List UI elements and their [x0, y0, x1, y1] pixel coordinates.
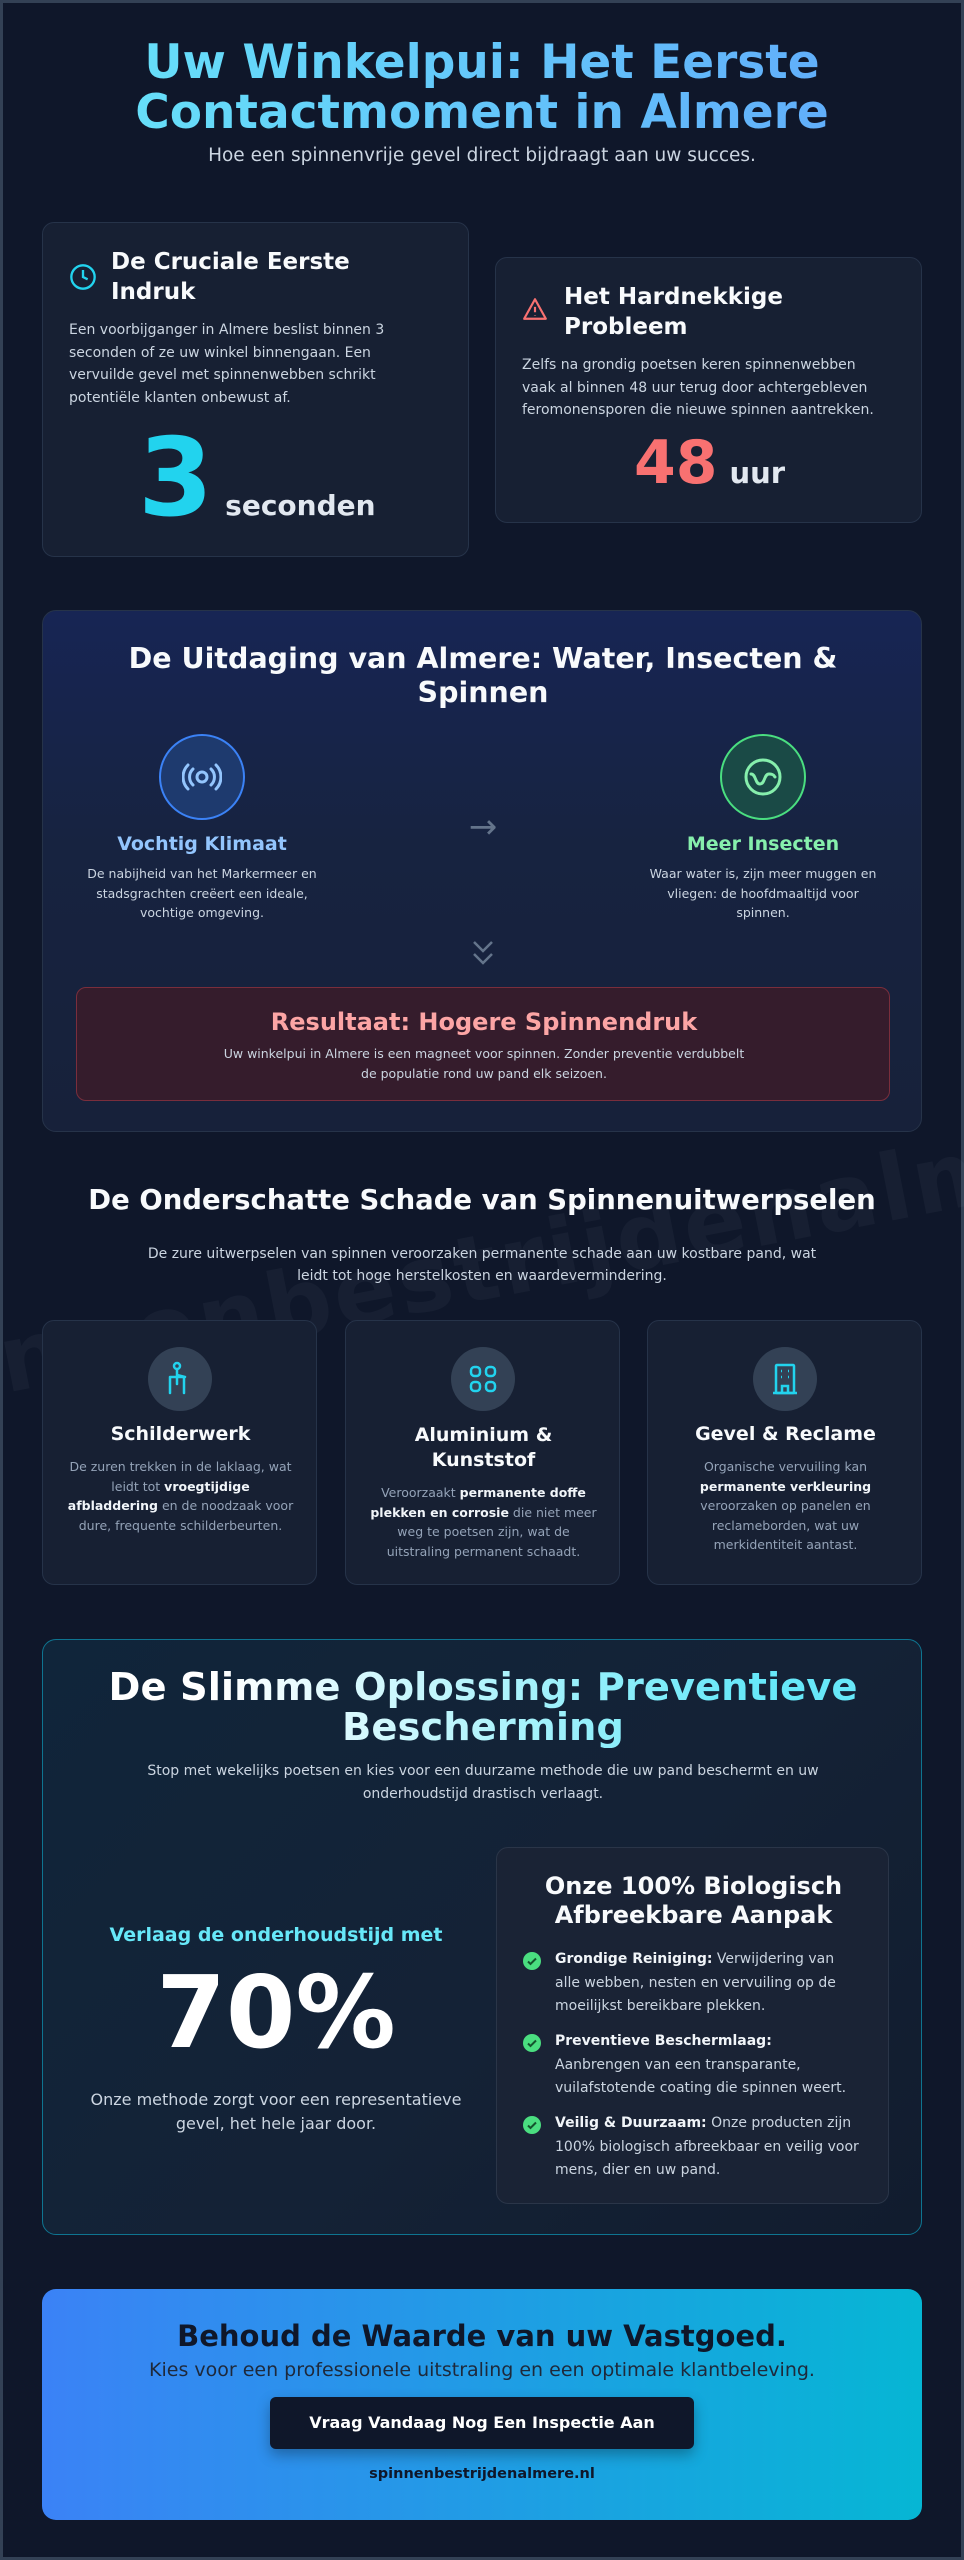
- text: climate: De nabijheid van het Markermeer en stadsgrachten creëert een ideale, vochtige omgeving.: [87, 866, 317, 920]
- text: damage intro: De zure uitwerpselen van spinnen veroorzaken permanente schade aan uw kostbare pand, wat leidt tot hoge herstelkosten en waardevermindering.: [148, 1246, 816, 1284]
- heading: Indruk: [111, 279, 195, 305]
- list item 2: [523, 2033, 846, 2096]
- heading: [564, 284, 783, 340]
- text: Zelfs na grondig poetsen keren spinnenwebben vaak al binnen 48 uur terug door achtergebleven feromonensporen die nieuwe spinnen aantrekken.: [522, 357, 874, 418]
- list item 2: Aanbrengen van een transparante, vuilafstotende coating die spinnen weert.: [555, 2056, 846, 2096]
- icon: clock: [70, 264, 96, 290]
- heading: [111, 249, 350, 305]
- icon: insects: [720, 734, 806, 820]
- heading: Het Hardnekkige: [564, 284, 783, 310]
- heading: Bescherming: [342, 1705, 624, 1750]
- panel: Aluminium: Aluminium &: [415, 1424, 552, 1446]
- heading: De Slimme Oplossing: Preventieve: [109, 1665, 857, 1710]
- panel: persistent problem: [495, 257, 922, 523]
- heading: [43, 1668, 923, 1748]
- list item 3: Veilig & Duurzaam: Onze producten zijn 100% biologisch afbreekbaar en veilig voor mens, dier en uw pand.: [555, 2115, 859, 2178]
- icon: chevrons down: [473, 941, 493, 965]
- panel: first impression: [42, 222, 469, 557]
- panel: Gevel: [647, 1320, 922, 1585]
- text: Een voorbijganger in Almere beslist binnen 3 seconden of ze uw winkel binnengaan. Een vervuilde gevel met spinnenwebben schrikt potentiële klanten onbewust af.: [69, 322, 384, 406]
- icon: warning: [523, 298, 547, 320]
- list item 2: Preventieve Beschermlaag:: [555, 2033, 772, 2049]
- callout: result: [76, 987, 890, 1101]
- stat: 70%: Onze methode zorgt voor een representatieve gevel, het hele jaar door.: [90, 2090, 461, 2133]
- callout: result: Uw winkelpui in Almere is een magneet voor spinnen. Zonder preventie verdubbelt de populatie rond uw pand elk seizoen.: [224, 1046, 744, 1081]
- list item 1: Grondige Reiniging: Verwijdering van alle webben, nesten en vervuiling op de moeilijkst bereikbare plekken.: [555, 1951, 836, 2014]
- heading: [129, 642, 837, 709]
- url: spinnenbestrijdenalmere.nl: [369, 2466, 595, 2482]
- stat: 70%: 70%: [156, 1954, 396, 2071]
- button: Vraag Vandaag Nog Een Inspectie Aan: [309, 2413, 655, 2432]
- stat: 3 seconden: 3 seconden: [138, 416, 376, 541]
- label: Vochtig Klimaat: Vochtig Klimaat: [117, 833, 287, 855]
- heading: De Cruciale Eerste: [111, 249, 350, 275]
- title: Uw Winkelpui: Het Eerste: [144, 35, 820, 90]
- panel: Schilderwerk: Schilderwerk: [111, 1423, 250, 1445]
- panel: call to action: Behoud de Waarde van uw Vastgoed.: [177, 2319, 787, 2353]
- subtitle: Hoe een spinnenvrije gevel direct bijdraagt aan uw succes.: [208, 145, 756, 166]
- stat: 70%: Verlaag de onderhoudstijd met: [110, 1924, 442, 1946]
- stat: 70%: [90, 1924, 461, 2133]
- panel: Schilderwerk: De zuren trekken in de laklaag, wat leidt tot vroegtijdige afbladdering en de noodzaak voor dure, frequente schilderbeurten.: [68, 1459, 293, 1532]
- title: Contactmoment in Almere: [135, 85, 829, 140]
- heading: damage: De Onderschatte Schade van Spinnenuitwerpselen: [88, 1184, 876, 1216]
- panel: Aluminium: [345, 1320, 620, 1585]
- panel: smart solution: [42, 1639, 922, 2235]
- panel: call to action: [42, 2289, 922, 2520]
- heading: De Uitdaging van Almere: Water, Insecten &: [129, 642, 837, 675]
- panel: approach: Onze 100% Biologisch: [545, 1872, 842, 1900]
- heading: Spinnen: [418, 676, 548, 709]
- button: [270, 2397, 694, 2449]
- panel: Schilderwerk: [42, 1320, 317, 1585]
- icon: painter: [148, 1347, 212, 1411]
- stat: 48 uur: 48 uur: [634, 428, 785, 498]
- label: Meer Insecten: Meer Insecten: [687, 833, 839, 855]
- arrow: →: [469, 807, 497, 847]
- callout: result: Resultaat: Hogere Spinnendruk: [271, 1008, 697, 1036]
- text: Stop met wekelijks poetsen en kies voor een duurzame methode die uw pand beschermt en uw onderhoudstijd drastisch verlaagt.: [147, 1763, 819, 1802]
- icon: building: [753, 1347, 817, 1411]
- title: [0, 38, 964, 138]
- panel: approach: Afbreekbare Aanpak: [555, 1901, 832, 1929]
- panel: Gevel: Gevel & Reclame: [695, 1423, 876, 1445]
- text: insects: Waar water is, zijn meer muggen en vliegen: de hoofdmaaltijd voor spinnen.: [650, 866, 876, 920]
- panel: Aluminium: Kunststof: [432, 1449, 535, 1471]
- icon: humid climate: [159, 734, 245, 820]
- panel: Gevel: Organische vervuiling kan permanente verkleuring veroorzaken op panelen en reclameborden, wat uw merkidentiteit aantast.: [700, 1459, 871, 1552]
- panel: call to action: Kies voor een professionele uitstraling en een optimale klantbeleving.: [149, 2359, 815, 2381]
- heading: Probleem: [564, 314, 688, 340]
- icon: grid: [451, 1347, 515, 1411]
- panel: approach: [496, 1847, 889, 2204]
- panel: Aluminium: Veroorzaakt permanente doffe plekken en corrosie die niet meer weg te poetsen zijn, wat de uitstraling permanent schaadt.: [370, 1485, 597, 1558]
- panel: Almere challenge: [42, 610, 922, 1132]
